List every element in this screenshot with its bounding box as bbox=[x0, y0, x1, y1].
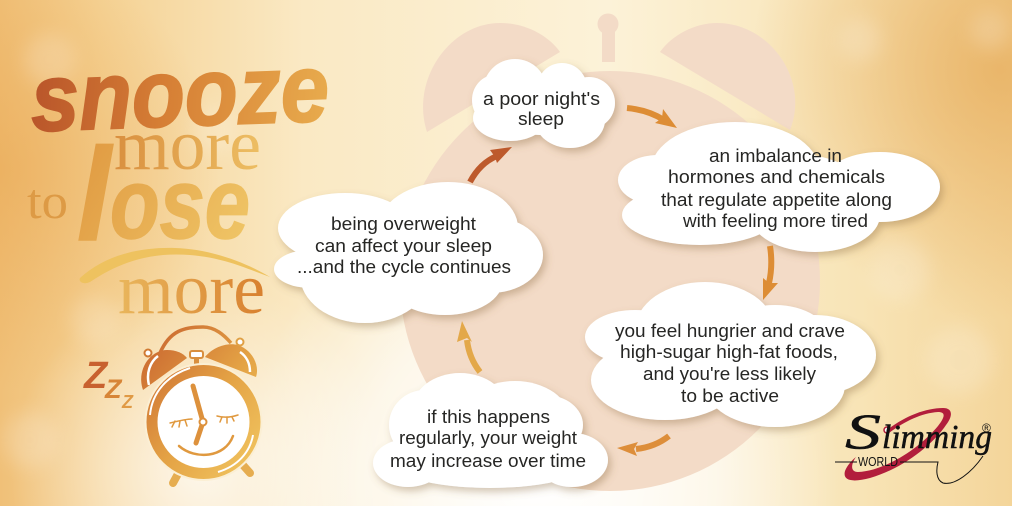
cloud: a poor night's sleep bbox=[472, 59, 615, 148]
cloud: weight may increase: if this happens bbox=[427, 406, 550, 427]
cloud: hungrier and cravings: to be active bbox=[681, 385, 779, 406]
clock hands bbox=[193, 386, 203, 443]
snore letters: Z bbox=[104, 374, 123, 404]
title word: more: more bbox=[114, 105, 261, 185]
cloud: hungrier and cravings: you feel hungrier and crave bbox=[615, 320, 845, 341]
snore letters: Z bbox=[83, 355, 109, 397]
arrow: hunger to weight gain bbox=[617, 436, 669, 456]
title word: to: to bbox=[27, 173, 68, 229]
cloud: being overweight: being overweight bbox=[331, 213, 476, 234]
cloud: hormone imbalance bbox=[618, 122, 940, 252]
snore letters: Z bbox=[121, 392, 134, 412]
brush swoosh bbox=[80, 248, 270, 283]
arrow: overweight to poor sleep bbox=[470, 147, 512, 182]
cloud: hormone imbalance: that regulate appetite along bbox=[661, 189, 892, 210]
cloud: weight may increase: may increase over time bbox=[390, 450, 586, 471]
logo sub-word: WORLD bbox=[858, 454, 898, 469]
cloud: hormone imbalance: an imbalance in bbox=[709, 145, 842, 166]
title word: more (second): more bbox=[118, 249, 265, 329]
cloud: weight may increase bbox=[373, 373, 608, 488]
arrow: imbalance to hunger bbox=[763, 246, 778, 300]
registered mark: ® bbox=[982, 421, 991, 435]
cloud: hormone imbalance: with feeling more tired bbox=[682, 210, 868, 231]
cloud: hungrier and cravings: high-sugar high-fat foods, bbox=[620, 341, 838, 362]
cloud: hungrier and cravings bbox=[585, 282, 876, 427]
cloud: being overweight bbox=[274, 182, 543, 323]
title word: lose: l bbox=[77, 121, 113, 268]
logo wordmark: limming bbox=[882, 419, 992, 456]
arrow: weight gain to overweight bbox=[457, 321, 480, 372]
logo red swoosh bbox=[845, 408, 951, 480]
arrow: poor sleep to imbalance bbox=[627, 108, 677, 128]
snore letters bbox=[83, 355, 134, 412]
title word: lose: ose bbox=[110, 148, 250, 260]
logo wordmark: S bbox=[845, 403, 881, 459]
cloud: a poor night's sleep: sleep bbox=[518, 108, 564, 129]
title word: snooze: snooze bbox=[29, 35, 331, 152]
cloud: hormone imbalance: hormones and chemicals bbox=[668, 166, 885, 187]
title: snooze more to lose more bbox=[27, 35, 331, 329]
closed eyes and smile bbox=[170, 415, 238, 455]
logo: Slimming World bbox=[835, 403, 992, 483]
cloud: hungrier and cravings: and you're less likely bbox=[643, 363, 817, 384]
cloud: weight may increase: regularly, your weight bbox=[399, 427, 577, 448]
cycle clouds bbox=[274, 59, 940, 488]
background alarm clock silhouette bbox=[400, 14, 820, 491]
icon: sleeping alarm clock bbox=[83, 327, 262, 483]
cloud: being overweight: can affect your sleep bbox=[315, 235, 492, 256]
cloud: a poor night's sleep: a poor night's bbox=[483, 88, 600, 109]
cloud: being overweight: ...and the cycle continues bbox=[297, 256, 511, 277]
cycle arrows bbox=[457, 108, 778, 456]
